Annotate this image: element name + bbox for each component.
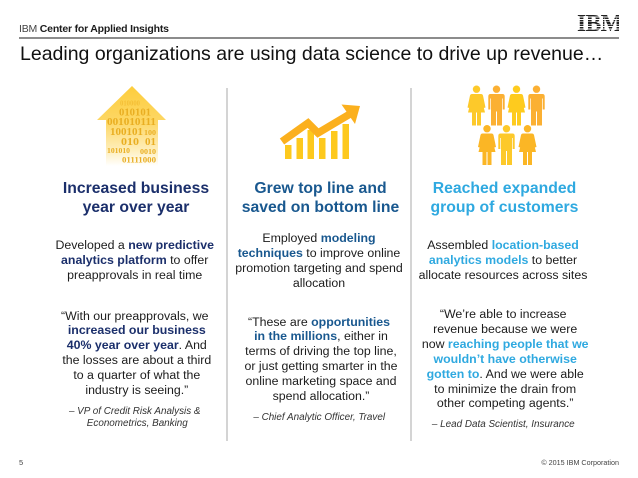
quote: column 3: now reaching people that we xyxy=(422,337,589,351)
quote: column 1: 40% year over year. And xyxy=(67,338,207,352)
attribution: column 1: – VP of Credit Risk Analysis & xyxy=(69,406,200,417)
icon: group of people xyxy=(468,86,545,165)
description: column 2 xyxy=(235,231,403,290)
description: column 2: techniques to improve online xyxy=(238,246,400,260)
quote: column 1: increased our business xyxy=(68,323,206,337)
description: column 3: Assembled location-based xyxy=(427,238,579,252)
icon: binary data house arrow: 100 xyxy=(144,129,157,137)
icon: binary data house arrow: 010101 xyxy=(119,108,151,118)
description: column 3 xyxy=(419,238,587,282)
description: column 1 xyxy=(55,238,214,282)
description: column 1: analytics platform to offer xyxy=(61,253,208,267)
header rule xyxy=(19,37,619,39)
quote: column 3: revenue because we were xyxy=(433,322,577,336)
description: column 2: Employed modeling xyxy=(262,231,376,245)
attribution: column 1 xyxy=(69,406,200,429)
quote: column 2: or just getting smarter in the xyxy=(244,359,398,373)
icon: binary data house arrow: 01 xyxy=(145,136,156,148)
quote: column 2: terms of driving the top line, xyxy=(245,344,397,358)
description: column 2: allocation xyxy=(293,276,345,290)
heading: column 3: Reached expanded xyxy=(433,180,576,197)
person 4 xyxy=(528,86,545,126)
heading: column 1: year over year xyxy=(83,199,189,216)
description: column 1: preapprovals in real time xyxy=(67,268,202,282)
quote: column 2 xyxy=(244,314,398,403)
icon: binary data house arrow: 100101 xyxy=(110,127,143,138)
quote: column 1: to a quarter of what the xyxy=(73,368,200,382)
icon: binary data house arrow: 010000 xyxy=(120,100,140,108)
title: Leading organizations are using data science to drive up revenue… xyxy=(20,43,603,65)
quote: column 1 xyxy=(61,308,211,397)
quote: column 1: industry is seeing.” xyxy=(85,383,188,397)
heading: column 1 xyxy=(63,180,209,216)
quote: column 2: online marketing space and xyxy=(246,374,396,388)
icon: binary data house arrow: 0010 xyxy=(140,148,157,156)
description: column 1: Developed a new predictive xyxy=(55,238,214,252)
quote: column 3 xyxy=(422,307,589,410)
person 6 xyxy=(498,125,515,165)
heading: column 3: group of customers xyxy=(431,199,578,216)
page number: 5 xyxy=(19,458,23,467)
person 1 xyxy=(468,86,486,126)
person 7 xyxy=(518,125,536,165)
icon: binary data house arrow: 01111000 xyxy=(122,154,156,164)
description: column 3: analytics models to better xyxy=(429,253,577,267)
description: column 2: promotion targeting and spend xyxy=(235,261,403,275)
quote: column 3: gotten to. And we were able xyxy=(427,367,584,381)
attribution: column 1: Econometrics, Banking xyxy=(87,418,188,429)
quote: column 3: “We’re able to increase xyxy=(440,307,567,321)
copyright: © 2015 IBM Corporation xyxy=(541,458,619,467)
column divider 2 xyxy=(410,88,412,441)
icon: rising bar chart with arrow xyxy=(280,104,360,159)
header label: IBM Center for Applied Insights xyxy=(19,23,169,35)
heading: column 1: Increased business xyxy=(63,180,209,197)
heading: column 2: Grew top line and xyxy=(254,180,387,197)
person 5 xyxy=(478,125,496,165)
quote: column 2: in the millions, either in xyxy=(254,329,388,343)
icon: binary data house arrow xyxy=(97,86,166,164)
attribution: column 3: – Lead Data Scientist, Insurance xyxy=(432,419,575,430)
quote: column 1: “With our preapprovals, we xyxy=(61,308,209,322)
person 2 xyxy=(488,86,505,126)
quote: column 1: the losses are about a third xyxy=(62,353,211,367)
heading: column 3 xyxy=(431,180,578,216)
icon: binary data house arrow: 101010 xyxy=(107,146,130,155)
quote: column 2: “These are opportunities xyxy=(248,314,390,328)
icon: binary data house arrow: 001010111 xyxy=(107,117,156,128)
quote: column 3: to minimize the drain from xyxy=(434,382,576,396)
quote: column 2: spend allocation.” xyxy=(273,389,369,403)
person 3 xyxy=(508,86,526,126)
quote: column 3: other competing agents.” xyxy=(437,396,573,410)
description: column 3: allocate resources across sites xyxy=(419,268,587,282)
quote: column 3: wouldn’t have otherwise xyxy=(434,352,577,366)
column divider 1 xyxy=(226,88,228,441)
attribution: column 2: – Chief Analytic Officer, Travel xyxy=(253,412,385,423)
heading: column 2 xyxy=(242,180,399,216)
heading: column 2: saved on bottom line xyxy=(242,199,399,216)
icon: binary data house arrow: 010 xyxy=(121,136,140,148)
